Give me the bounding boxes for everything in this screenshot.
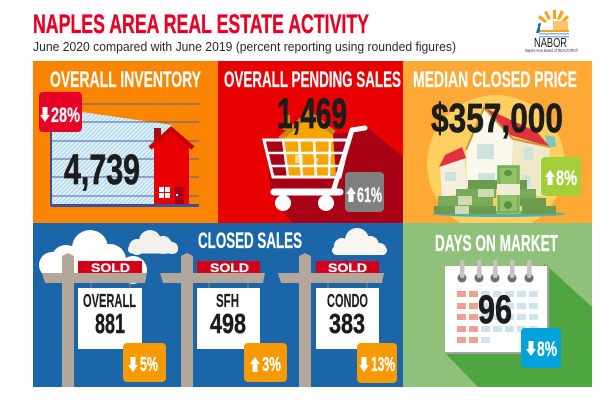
panel: closed sales <box>33 223 403 387</box>
icon: red house <box>150 128 193 204</box>
sign: overall: SOLD <box>91 261 130 275</box>
sign: overall: OVERALL <box>83 290 136 311</box>
sign: SFH: 498 <box>210 308 246 339</box>
badge: up 8%: 8% <box>556 167 577 190</box>
badge: down 13%: 13% <box>371 354 395 376</box>
NABOR logo <box>525 10 579 53</box>
badge: down 28% <box>39 92 82 132</box>
panel: median closed price <box>403 61 592 223</box>
sign: SFH: SOLD <box>210 261 249 275</box>
value: 4,739 <box>64 146 140 194</box>
cart shadow <box>266 125 403 223</box>
subtitle: June 2020 compared with June 2019 (percent reporting using rounded figures) <box>33 40 456 54</box>
title: NAPLES AREA REAL ESTATE ACTIVITY <box>33 9 369 39</box>
panel: overall pending sales <box>218 61 403 223</box>
area chart <box>50 104 199 207</box>
sign: condo: 383 <box>329 308 365 339</box>
sign: condo: CONDO <box>327 290 368 311</box>
calendar shadow <box>445 264 592 387</box>
panel: days on market <box>403 223 592 387</box>
icon: house in cart <box>280 113 336 177</box>
badge: up 61% <box>345 172 384 212</box>
icon: clouds left <box>39 230 178 284</box>
sign: condo: SOLD <box>328 261 367 275</box>
sign: SFH: SFH <box>216 290 239 311</box>
NABOR logo: NABOR <box>534 35 567 50</box>
badge: down 8% <box>521 328 561 368</box>
value: 96 <box>478 288 512 332</box>
badge: down 8%: 8% <box>537 338 557 361</box>
icon: shopping cart <box>264 128 365 211</box>
badge: up 8% <box>541 157 581 196</box>
value: 1,469 <box>277 90 347 138</box>
badge: up 3%: 3% <box>262 354 281 376</box>
icon: cloud right <box>332 228 387 255</box>
heading: CLOSED SALES <box>198 228 302 253</box>
illustration: house with money <box>427 95 565 223</box>
badge: up 61%: 61% <box>357 184 382 207</box>
heading: OVERALL PENDING SALES <box>224 67 401 92</box>
badge: down 5%: 5% <box>140 354 158 376</box>
heading: OVERALL INVENTORY <box>50 67 201 92</box>
sign: SFH <box>160 253 287 387</box>
badge: down 28%: 28% <box>51 104 80 127</box>
sign: overall <box>42 253 166 387</box>
NABOR logo: Naples Area Board of REALTORS® <box>525 48 579 53</box>
sign: overall: 881 <box>95 308 125 339</box>
value: $357,000 <box>431 95 563 141</box>
icon: calendar <box>445 260 549 354</box>
panel: overall inventory <box>33 61 218 223</box>
sign: condo <box>278 253 397 387</box>
